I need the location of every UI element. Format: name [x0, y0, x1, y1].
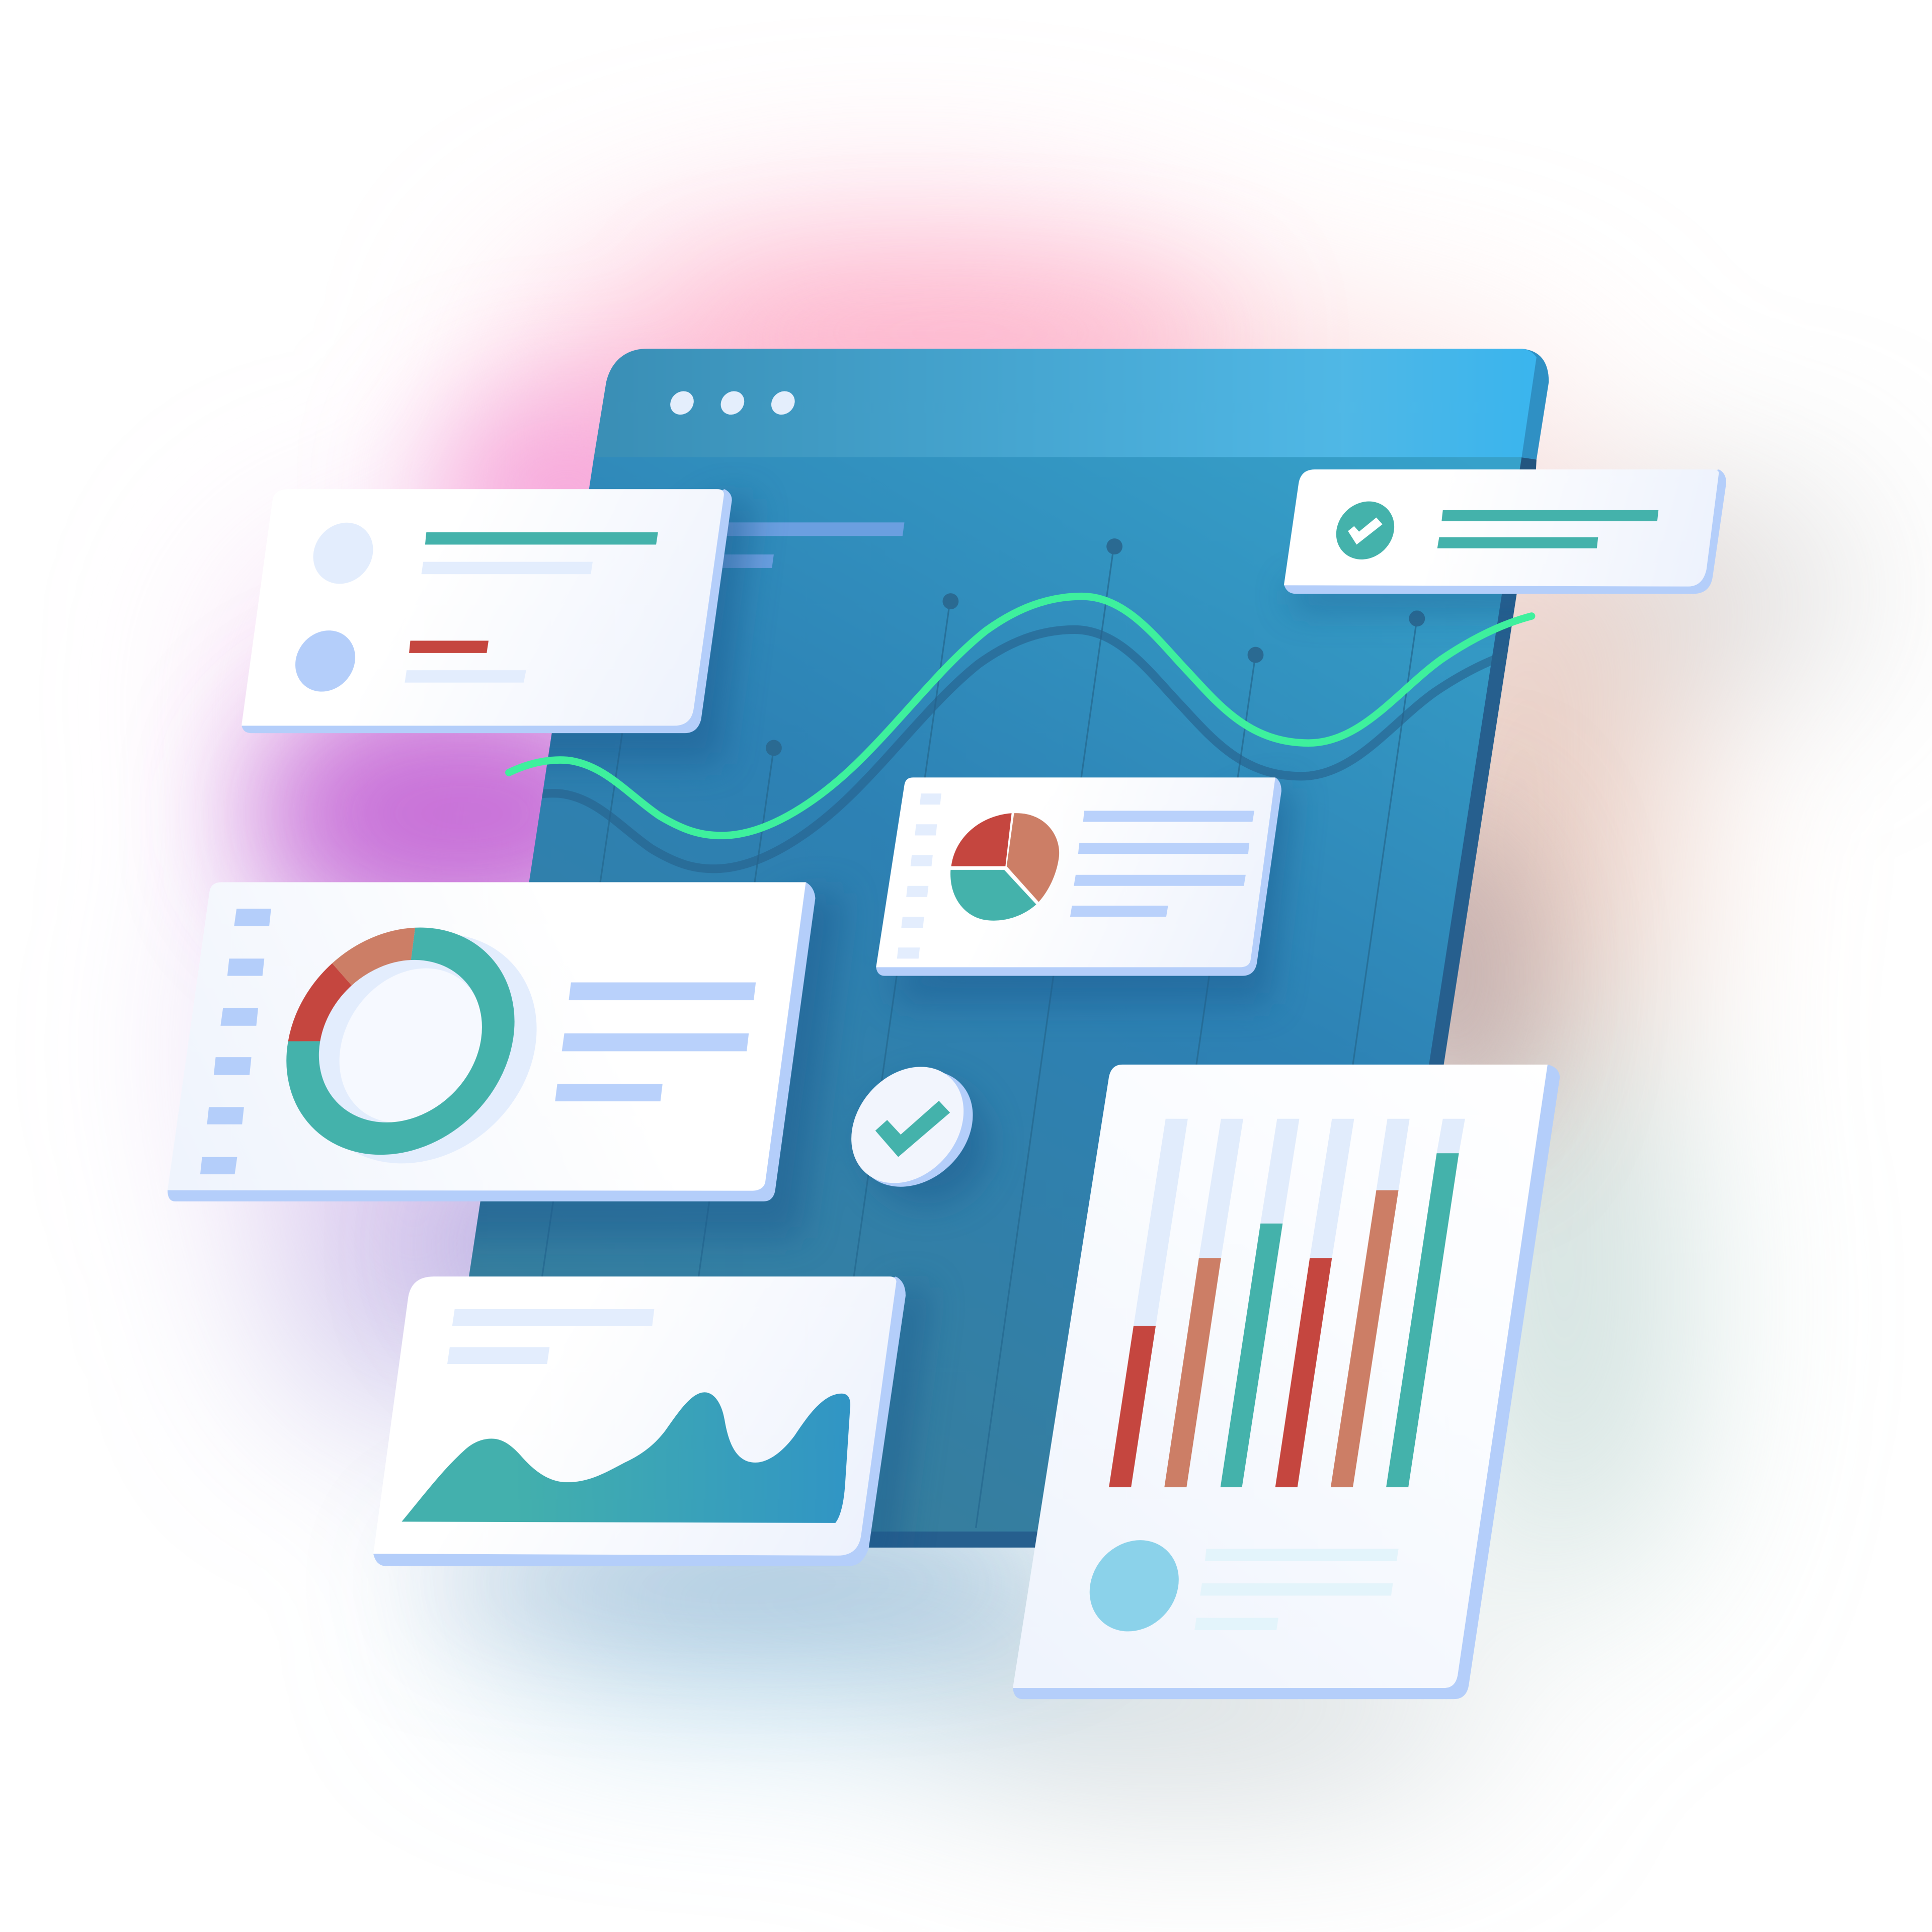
- donut ring: teal: [293, 938, 508, 1145]
- background glow: [234, 247, 1842, 1768]
- light line 2: [405, 670, 526, 683]
- line chart shadow: [502, 629, 1524, 869]
- bar 5: [1331, 1190, 1399, 1487]
- bar 6: [1386, 1153, 1459, 1487]
- donut inner disc: [330, 963, 493, 1128]
- side labels: [897, 793, 941, 958]
- donut ring: red: [304, 975, 342, 1041]
- pie slice: salmon: [1007, 813, 1059, 902]
- avatar light: [301, 511, 385, 596]
- window corner shade: [1520, 457, 1537, 469]
- avatar: [1071, 1522, 1197, 1650]
- check mark: [875, 1101, 950, 1157]
- side labels: [200, 909, 271, 1174]
- badge face: [843, 1062, 972, 1188]
- window right side edge: [1354, 469, 1536, 1548]
- panel: profile list card: [242, 489, 732, 733]
- avatar blue: [283, 618, 368, 704]
- badge edge: [848, 1066, 981, 1191]
- card face: [373, 1276, 897, 1556]
- card face: [1013, 1065, 1548, 1688]
- light line: [422, 562, 593, 574]
- card face: [168, 882, 806, 1191]
- panel: area chart card: [373, 1276, 906, 1566]
- window heading bars: [714, 522, 905, 568]
- panel: browser window: [469, 349, 1549, 1548]
- window control dots: [669, 390, 796, 415]
- bar 2: [1164, 1258, 1221, 1487]
- red line: [409, 640, 489, 653]
- card edge: [373, 1276, 906, 1566]
- panel: donut chart card: [168, 882, 815, 1201]
- window title bar: [594, 349, 1537, 457]
- pie chart: [950, 813, 1059, 921]
- card edge: [168, 882, 815, 1201]
- icon: check circle: [1324, 490, 1406, 572]
- bar 1: [1109, 1326, 1156, 1487]
- teal line: [425, 532, 658, 544]
- card edge: [1284, 469, 1726, 594]
- card edge: [242, 489, 732, 733]
- donut chart: [293, 927, 548, 1171]
- teal lines: [1437, 510, 1658, 548]
- card shadows on window: [370, 499, 1713, 1577]
- card face: [876, 777, 1275, 967]
- line chart: green curve: [509, 596, 1532, 836]
- card face: [242, 489, 724, 726]
- card edge: [1013, 1065, 1560, 1699]
- title bar right side: [1515, 349, 1549, 459]
- bar 3: [1221, 1224, 1282, 1487]
- chart grid lines with dots: [542, 538, 1425, 1528]
- donut ring segments: [293, 938, 508, 1145]
- donut backdrop: [294, 927, 548, 1171]
- bar tracks: [1134, 1119, 1465, 1326]
- area chart: [401, 1392, 850, 1523]
- panel: pie chart card: [876, 777, 1281, 976]
- pie slice: red: [951, 813, 1012, 866]
- text lines: [555, 983, 756, 1101]
- pie slice: teal: [950, 870, 1036, 921]
- caption lines: [1194, 1549, 1399, 1630]
- panel: bar chart card: [1013, 1065, 1560, 1699]
- card edge: [876, 777, 1281, 976]
- text lines: [1070, 811, 1254, 917]
- donut ring: salmon: [342, 944, 413, 975]
- window bottom edge: [428, 1532, 1364, 1548]
- bar 4: [1275, 1258, 1332, 1487]
- panel: status card: [1284, 469, 1726, 594]
- icon: check badge: [843, 1062, 981, 1191]
- window body: [430, 457, 1528, 1540]
- heading lines: [447, 1309, 654, 1364]
- card face: [1284, 469, 1719, 587]
